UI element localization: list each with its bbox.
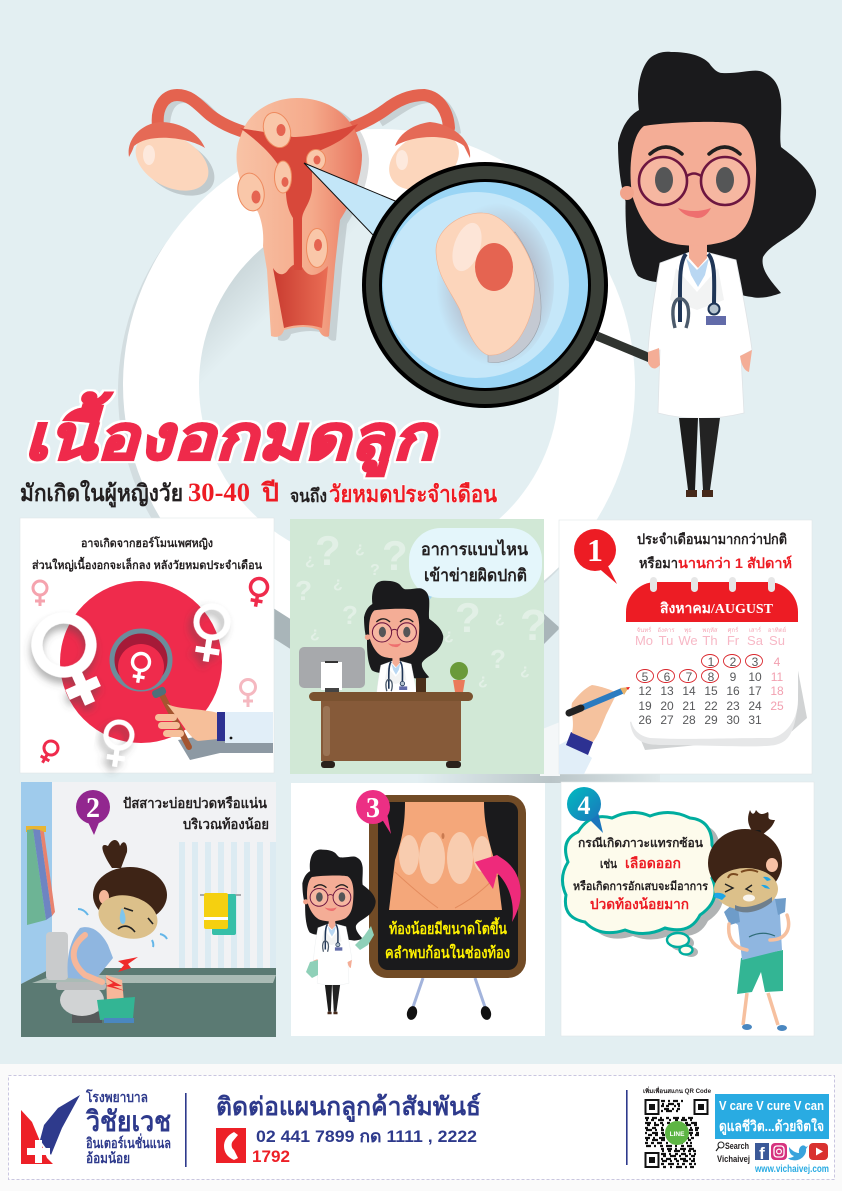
- question marks: ¿: [444, 627, 454, 644]
- badge 3: 3: [366, 793, 380, 824]
- sick girl on toilet: [68, 840, 167, 1023]
- speech bubble: [409, 528, 542, 610]
- dates: 8: [708, 670, 715, 684]
- red circle: [60, 581, 222, 743]
- symptom text: [637, 531, 792, 571]
- dates: 11: [771, 670, 784, 684]
- QR code: LINE: [670, 1131, 685, 1138]
- dates: 19: [638, 699, 652, 713]
- footer band: [0, 1064, 842, 1191]
- weekday names: จันทร์: [637, 626, 652, 634]
- dates: 5: [642, 670, 649, 684]
- symptom text: หรือมา: [639, 555, 678, 571]
- chair back: [416, 678, 426, 692]
- fibroid close-up: [436, 213, 541, 363]
- dates: 15: [704, 684, 718, 698]
- dates: 29: [704, 713, 718, 727]
- panel text: อาจเกิดจากฮอร์โมนเพศหญิง: [81, 535, 213, 550]
- search vichaivej: [716, 1141, 750, 1164]
- cloud text: กรณีเกิดภาวะแทรกซ้อน: [578, 836, 704, 850]
- symptom text: นานกว่า 1 สัปดาห์: [678, 555, 792, 571]
- abdomen illustration: [389, 802, 502, 910]
- bathroom wall strip: [21, 782, 52, 984]
- doctor at desk: [364, 581, 443, 759]
- badge 1: [574, 529, 617, 584]
- uterus shadow: [244, 102, 369, 341]
- dates: 27: [660, 713, 674, 727]
- question marks: ¿: [310, 625, 320, 642]
- question marks: [295, 527, 547, 689]
- uterine cavity: [240, 124, 358, 270]
- question marks: ¿: [305, 552, 315, 569]
- fibroids: [235, 109, 328, 267]
- hospital name: อ้อมน้อย: [86, 1150, 130, 1166]
- main title: เนื้องอกมดลูก: [24, 392, 439, 477]
- dates: 2: [730, 655, 737, 669]
- weekday names: อาทิตย์: [768, 626, 786, 634]
- cloud text: เลือดออก: [625, 855, 681, 871]
- dates: 18: [770, 684, 784, 698]
- dates: 28: [682, 713, 696, 727]
- monitor: [299, 647, 365, 692]
- fallopian tube shadow: [165, 98, 456, 134]
- cloud text: [573, 836, 709, 912]
- pink arrow: [475, 855, 521, 922]
- QR caption: เพิ่มเพื่อนสแกน QR Code: [643, 1086, 712, 1095]
- gloves: [306, 926, 374, 978]
- badge 1: 1: [587, 532, 603, 568]
- question marks: ¿: [355, 540, 365, 557]
- board legs: [405, 978, 493, 1021]
- hospital name: อินเตอร์เนชั่นแนล: [86, 1133, 171, 1151]
- dates: [638, 655, 784, 727]
- dates: 22: [704, 699, 718, 713]
- question marks: ?: [315, 527, 341, 574]
- dates: 10: [748, 670, 762, 684]
- dates: 31: [748, 713, 762, 727]
- dates: 21: [682, 699, 696, 713]
- calendar: Sa: [747, 633, 764, 648]
- weekday names: เสาร์: [749, 626, 762, 634]
- fibroid nuclei: [252, 124, 322, 251]
- badge 4: 4: [578, 791, 590, 820]
- symptom text: ประจำเดือนมามากกว่าปกติ: [637, 531, 787, 547]
- female symbols: [28, 577, 269, 768]
- board text: คลำพบก้อนในช่องท้อง: [385, 943, 510, 962]
- dates: 9: [730, 670, 737, 684]
- footer contact box: 1792: [252, 1147, 290, 1166]
- panel: hormone cause: [20, 518, 274, 773]
- hospital name: [85, 1088, 171, 1166]
- cloud text: เช่น: [600, 857, 618, 871]
- calendar: We: [678, 633, 698, 648]
- dates: 30: [726, 713, 740, 727]
- desk: [309, 692, 473, 768]
- dates: 4: [774, 655, 781, 669]
- board text: [385, 917, 510, 962]
- calendar: Mo: [635, 633, 653, 648]
- social icons: f: [759, 1144, 765, 1163]
- question marks: ?: [342, 600, 358, 630]
- subtitle: มักเกิดในผู้หญิงวัย: [20, 479, 183, 508]
- cloud text: หรือเกิดการอักเสบจะมีอาการ: [573, 880, 709, 893]
- badge 2: 2: [86, 793, 100, 824]
- panel: which symptoms are abnormal: [290, 519, 547, 774]
- doctor pointing: [302, 850, 376, 1014]
- left ovary: [126, 122, 224, 207]
- dates: 1: [708, 655, 715, 669]
- symptom text: [123, 795, 269, 832]
- towel rail: [200, 893, 241, 935]
- crying girl: [708, 810, 789, 1031]
- slogan box: ดูแลชีวิต...ด้วยจิตใจ: [719, 1117, 824, 1135]
- dates: 3: [752, 655, 759, 669]
- question marks: ?: [520, 601, 547, 650]
- potted plant: [450, 662, 468, 692]
- uterus body: [237, 98, 362, 337]
- subtitle: วัยหมดประจำเดือน: [329, 481, 497, 507]
- dates: 12: [638, 684, 652, 698]
- speech bubble: เข้าข่ายผิดปกติ: [424, 566, 527, 585]
- subtitle: [20, 478, 497, 508]
- dates: 7: [686, 670, 693, 684]
- subtitle: จนถึง: [290, 486, 327, 506]
- calendar: Fr: [727, 633, 740, 648]
- subtitle: ปี: [260, 479, 279, 507]
- panel: symptom 4 complications: [561, 782, 814, 1036]
- dates: 16: [726, 684, 740, 698]
- hospital logo: [21, 1095, 80, 1164]
- callout beam: [304, 163, 400, 236]
- illustration: uterus with fibroids: [126, 95, 470, 341]
- dates: 24: [748, 699, 762, 713]
- contact heading: ติดต่อแผนกลูกค้าสัมพันธ์: [216, 1092, 481, 1123]
- badge 2: [76, 790, 110, 835]
- question marks: ¿: [495, 610, 505, 627]
- question marks: ?: [370, 562, 380, 579]
- slogan box: [715, 1094, 829, 1139]
- board text: ท้องน้อยมีขนาดโตขึ้น: [389, 917, 507, 938]
- icon: phone: [216, 1128, 246, 1163]
- question marks: ?: [490, 644, 506, 674]
- badge 4: [567, 787, 603, 833]
- magnifier with hand: [112, 631, 273, 760]
- QR code: [644, 1099, 708, 1168]
- footer contact box: [8, 1076, 834, 1180]
- badge 3: [356, 790, 391, 834]
- dates: 25: [770, 699, 784, 713]
- panel: symptom 3 enlarged abdomen: [291, 783, 545, 1036]
- shower curtain: [179, 842, 276, 968]
- doctor character: [618, 52, 816, 497]
- social icons: [755, 1143, 828, 1163]
- calendar: [626, 577, 807, 750]
- dates: 17: [748, 684, 762, 698]
- question marks: ¿: [333, 575, 343, 592]
- calendar: สิงหาคม/AUGUST: [660, 601, 774, 617]
- phone numbers: 02 441 7899 กด 1111 , 2222: [256, 1127, 477, 1146]
- symptom text: บริเวณท้องน้อย: [183, 816, 269, 832]
- question marks: ?: [382, 532, 408, 579]
- left fimbria: [129, 122, 205, 157]
- dates: 20: [660, 699, 674, 713]
- dates: 6: [664, 670, 671, 684]
- magnifying glass: [362, 162, 608, 408]
- question marks: ?: [455, 594, 481, 641]
- hospital name: โรงพยาบาล: [85, 1088, 148, 1105]
- floor: [21, 968, 276, 1037]
- calendar: Tu: [659, 633, 673, 648]
- panel: symptom 2 frequent urination: [21, 782, 276, 1037]
- speech bubble: อาการแบบไหน: [421, 539, 528, 559]
- weekday names: ศุกร์: [728, 626, 739, 634]
- thought cloud: [562, 812, 724, 957]
- fallopian tubes: [158, 95, 449, 140]
- search vichaivej: Vichaivej: [717, 1154, 750, 1164]
- question marks: ¿: [478, 672, 488, 689]
- hospital name: วิชัยเวช: [85, 1106, 171, 1137]
- weekday names: พฤหัส: [702, 627, 718, 634]
- dates: 14: [682, 684, 696, 698]
- circled dates: [636, 654, 762, 682]
- panel: symptom 1 heavy periods: [559, 520, 812, 774]
- panel text: [32, 535, 262, 572]
- cervix and vaginal canal: [273, 264, 328, 328]
- dates: 13: [660, 684, 674, 698]
- subtitle: 30-40: [188, 478, 250, 507]
- board: [369, 795, 526, 978]
- weekday names: [637, 626, 786, 634]
- magnifying glass handle: [597, 336, 650, 358]
- panel text: ส่วนใหญ่เนื้องอกจะเล็กลง หลังวัยหมดประจำเดือน: [32, 556, 262, 572]
- calendar: Th: [702, 633, 718, 648]
- hanging towels left: [26, 826, 55, 925]
- hand with pen: [559, 685, 630, 774]
- search vichaivej: Search: [725, 1141, 749, 1151]
- right fimbria: [395, 122, 470, 158]
- question marks: ¿: [520, 662, 530, 679]
- right ovary: [379, 121, 469, 201]
- weekday names: อังคาร: [657, 627, 675, 634]
- dates: 23: [726, 699, 740, 713]
- calendar: Su: [769, 633, 785, 648]
- toilet: [46, 932, 106, 1023]
- slogan box: V care V cure V can: [719, 1099, 824, 1113]
- symptom text: ปัสสาวะบ่อยปวดหรือแน่น: [123, 795, 267, 811]
- dates: 26: [638, 713, 652, 727]
- question marks: ?: [295, 575, 312, 606]
- cloud text: ปวดท้องน้อยมาก: [590, 896, 689, 912]
- decorative white ring: [118, 129, 660, 783]
- weekday names: พุธ: [684, 627, 692, 634]
